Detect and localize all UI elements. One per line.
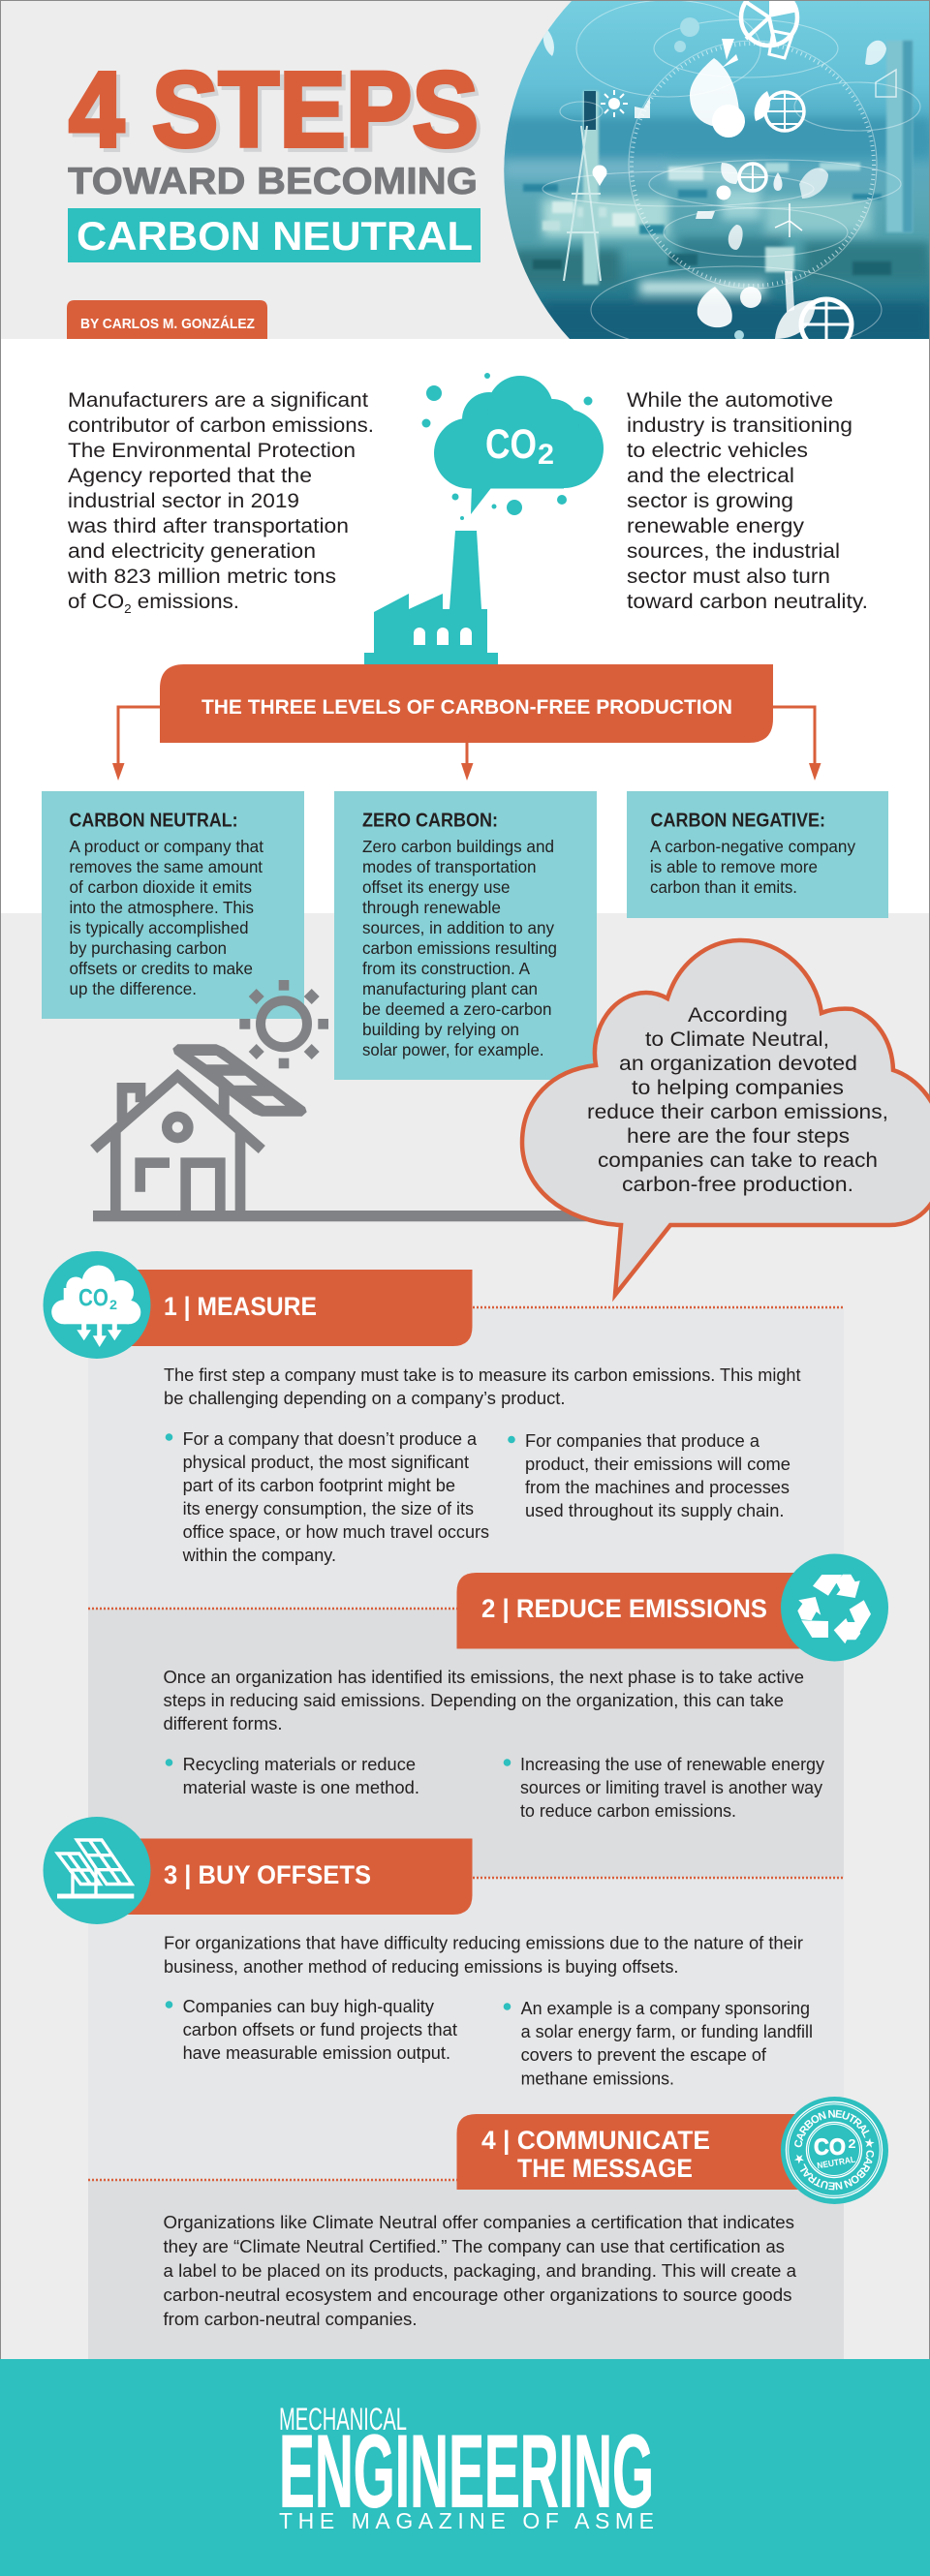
step 3 bullet left: Companies can buy high-quality [183,1996,435,2016]
intro text right: to electric vehicles [627,439,808,462]
panel: carbon negative: carbon than it emits. [650,877,797,897]
intro text left [67,388,374,616]
step 2: reduce emissions: 2 | REDUCE EMISSIONS [481,1594,767,1623]
step 4 text: they are “Climate Neutral Certified.” The company can use that certification as [163,2236,785,2256]
footer band with magazine logo [0,2359,930,2576]
step 3 bullet right: covers to prevent the escape of [521,2044,767,2065]
step 2 bullet left: material waste is one method. [183,1777,419,1797]
panel: carbon negative: A carbon-negative company [650,837,855,856]
intro text right [627,388,868,613]
intro text left: and electricity generation [68,539,316,563]
step 2 text: steps in reducing said emissions. Depending on the organization, this can take [163,1690,784,1710]
step 3 bullet left: carbon offsets or fund projects that [183,2019,458,2039]
callout: speech cloud: companies can take to reach [598,1149,878,1172]
panel: zero carbon: solar power, for example. [362,1040,544,1059]
footer band with magazine logo: MECHANICAL [279,2402,407,2437]
panel: carbon neutral: of carbon dioxide it emits [70,877,252,897]
step 4: communicate the message: THE MESSAGE [517,2154,693,2183]
panel: zero carbon: from its construction. A [362,959,530,978]
footer band with magazine logo: THE MAGAZINE OF ASME [279,2508,654,2533]
icon: CO2 cloud with down arrows: CO [78,1286,108,1311]
step 3 text: business, another method of reducing emissions is buying offsets. [164,1956,678,1977]
intro text left: contributor of carbon emissions. [68,414,374,437]
panel: carbon negative: CARBON NEGATIVE: [651,810,825,831]
panel: zero carbon: sources, in addition to any [362,918,554,937]
panel: carbon neutral: removes the same amount [70,857,263,876]
step 3 bullet right: a solar energy farm, or funding landfill [521,2021,813,2041]
intro text right: While the automotive [627,388,833,412]
intro text left: Manufacturers are a significant [68,388,368,412]
icon: CO2 cloud with factory: 2 [538,439,554,471]
panel: carbon neutral [42,791,304,1019]
byline tab: BY CARLOS M. GONZÁLEZ [80,316,255,332]
intro text right: renewable energy [627,514,804,537]
step 1: measure: 1 | MEASURE [164,1292,317,1321]
step 1 bullet right: For companies that produce a [525,1430,760,1451]
step 2 bullet right: Increasing the use of renewable energy [520,1754,825,1774]
icon: house with solar panel and ground line [93,1044,597,1221]
step 2 bullet left [166,1754,419,1797]
step 3 bullet left [166,1996,458,2063]
step 4: communicate the message: 4 | COMMUNICATE [481,2126,710,2155]
panel: zero carbon: offset its energy use [362,877,510,897]
step 3 bullet right [504,1998,813,2088]
step 2 text: Once an organization has identified its emissions, the next phase is to take active [163,1667,804,1687]
panel: zero carbon: building by relying on [362,1020,519,1039]
step 4: communicate the message [457,2097,888,2204]
intro text left: industrial sector in 2019 [68,489,299,512]
step 1 bullet right: from the machines and processes [525,1477,790,1497]
header photo: industrial city with eco icons [494,0,930,353]
icon: sun [239,980,328,1068]
step 2 text: different forms. [163,1713,283,1733]
panel: zero carbon: through renewable [362,898,501,917]
panel: zero carbon: Zero carbon buildings and [362,837,554,856]
step 1: measure [43,1251,473,1359]
step 2: reduce emissions [457,1553,888,1662]
connector arrows from banner [112,707,822,781]
callout: speech cloud: reduce their carbon emissions, [587,1100,888,1123]
icon: CO2 cloud with factory [364,373,604,665]
step 1 bullet left: its energy consumption, the size of its [183,1498,474,1518]
step panels background [88,1307,844,2359]
step 2 bullet right: to reduce carbon emissions. [520,1800,736,1821]
step 4 text: from carbon-neutral companies. [163,2309,417,2329]
step 1 bullet right: used throughout its supply chain. [525,1500,785,1520]
step 3 bullet right: methane emissions. [521,2069,674,2088]
panel: carbon neutral: up the difference. [70,979,197,998]
panel: carbon negative: is able to remove more [650,857,818,876]
intro text right: sector is growing [627,489,793,512]
step 2 bullet right: sources or limiting travel is another way [520,1777,823,1797]
step 2 bullet right [504,1754,825,1821]
callout: speech cloud: According [688,1003,788,1027]
title: 4 STEPS: 4 STEPS [73,54,482,173]
step 1 text: be challenging depending on a company’s product. [164,1388,566,1408]
step 2 bullet left: Recycling materials or reduce [183,1754,416,1774]
intro text right: toward carbon neutrality. [627,590,868,613]
step 1 bullet left: within the company. [182,1545,336,1565]
step 4 text: Organizations like Climate Neutral offer companies a certification that indicates [163,2212,794,2232]
panel: zero carbon [334,791,597,1080]
step 4 text: carbon-neutral ecosystem and encourage other organizations to source goods [163,2285,792,2305]
step 1 bullet left: office space, or how much travel occurs [183,1521,489,1542]
icon: carbon neutral stamp: 2 [849,2136,856,2151]
step 4 text: a label to be placed on its products, packaging, and branding. This will create a [163,2260,797,2281]
icon: carbon neutral stamp: NEUTRAL [817,2155,856,2170]
icon: carbon neutral stamp [781,2097,888,2204]
step 1 bullet right: product, their emissions will come [525,1454,790,1474]
panel: zero carbon: modes of transportation [362,857,537,876]
panel: carbon neutral: CARBON NEUTRAL: [70,810,238,831]
subtitle: toward becoming: TOWARD BECOMING [68,161,478,202]
step 4 text [163,2212,797,2329]
step 3: buy offsets: 3 | BUY OFFSETS [164,1860,371,1889]
intro text left: with 823 million metric tons [67,565,336,588]
callout: speech cloud: here are the four steps [627,1124,850,1148]
banner: the three levels: THE THREE LEVELS OF CARBON-FREE PRODUCTION [202,695,732,719]
step 1 text [164,1365,801,1408]
panel: carbon neutral: by purchasing carbon [70,938,227,958]
icon: carbon neutral stamp: CARBON NEUTRAL ★ CARBON NEUTRAL ★ [794,2109,874,2191]
step 1 text: The first step a company must take is to measure its carbon emissions. This might [164,1365,801,1385]
step 1 bullet left [166,1428,489,1565]
icon: carbon neutral stamp: CO [814,2134,846,2161]
panel: carbon neutral: offsets or credits to make [70,959,253,978]
panel: carbon neutral: A product or company that [70,837,264,856]
panel: carbon negative [627,791,888,918]
icon: CO2 cloud with factory: CO [485,421,537,468]
callout: speech cloud: an organization devoted [619,1052,857,1075]
intro text left: The Environmental Protection [68,439,356,462]
icon: recycling arrows [781,1553,888,1662]
callout: speech cloud [522,940,930,1295]
panel: carbon neutral: into the atmosphere. This [70,898,254,917]
step 1 bullet left: For a company that doesn’t produce a [183,1428,478,1449]
callout: speech cloud: carbon-free production. [622,1173,853,1196]
icon: CO2 cloud with down arrows: 2 [109,1297,117,1312]
banner: the three levels [160,664,773,743]
intro text left: of CO [68,590,122,613]
intro text right: and the electrical [627,464,794,487]
intro text right: sector must also turn [627,565,830,588]
step 2 text [163,1667,804,1733]
panel: zero carbon: manufacturing plant can [362,979,538,998]
panel: zero carbon: carbon emissions resulting [362,938,557,958]
step 1 bullet left: physical product, the most significant [183,1452,470,1472]
callout: speech cloud: to helping companies [632,1076,844,1099]
intro text right: sources, the industrial [627,539,840,563]
step 1 bullet left: part of its carbon footprint might be [183,1475,455,1495]
panel: zero carbon: ZERO CARBON: [362,810,498,831]
icon: CO2 cloud with down arrows [43,1251,151,1359]
title: 4 STEPS: 4 STEPS [69,50,479,169]
subtitle banner: carbon neutral: CARBON NEUTRAL [77,213,473,259]
intro text left: was third after transportation [67,514,349,537]
intro text left: Agency reported that the [68,464,312,487]
icon: solar panels [43,1817,151,1924]
step 3 text [164,1933,803,1977]
intro text left: emissions. [132,590,239,613]
callout: speech cloud: to Climate Neutral, [645,1027,829,1051]
step 3: buy offsets [43,1817,473,1924]
panel: carbon neutral: is typically accomplished [70,918,248,937]
byline tab [67,300,267,339]
intro text right: industry is transitioning [627,414,852,437]
panel: zero carbon: be deemed a zero-carbon [362,999,552,1019]
step 3 bullet left: have measurable emission output. [183,2042,450,2063]
step 1 bullet right [508,1430,790,1520]
step 3 bullet right: An example is a company sponsoring [521,1998,810,2018]
step 3 text: For organizations that have difficulty reducing emissions due to the nature of their [164,1933,803,1953]
intro text left: 2 [124,601,132,616]
